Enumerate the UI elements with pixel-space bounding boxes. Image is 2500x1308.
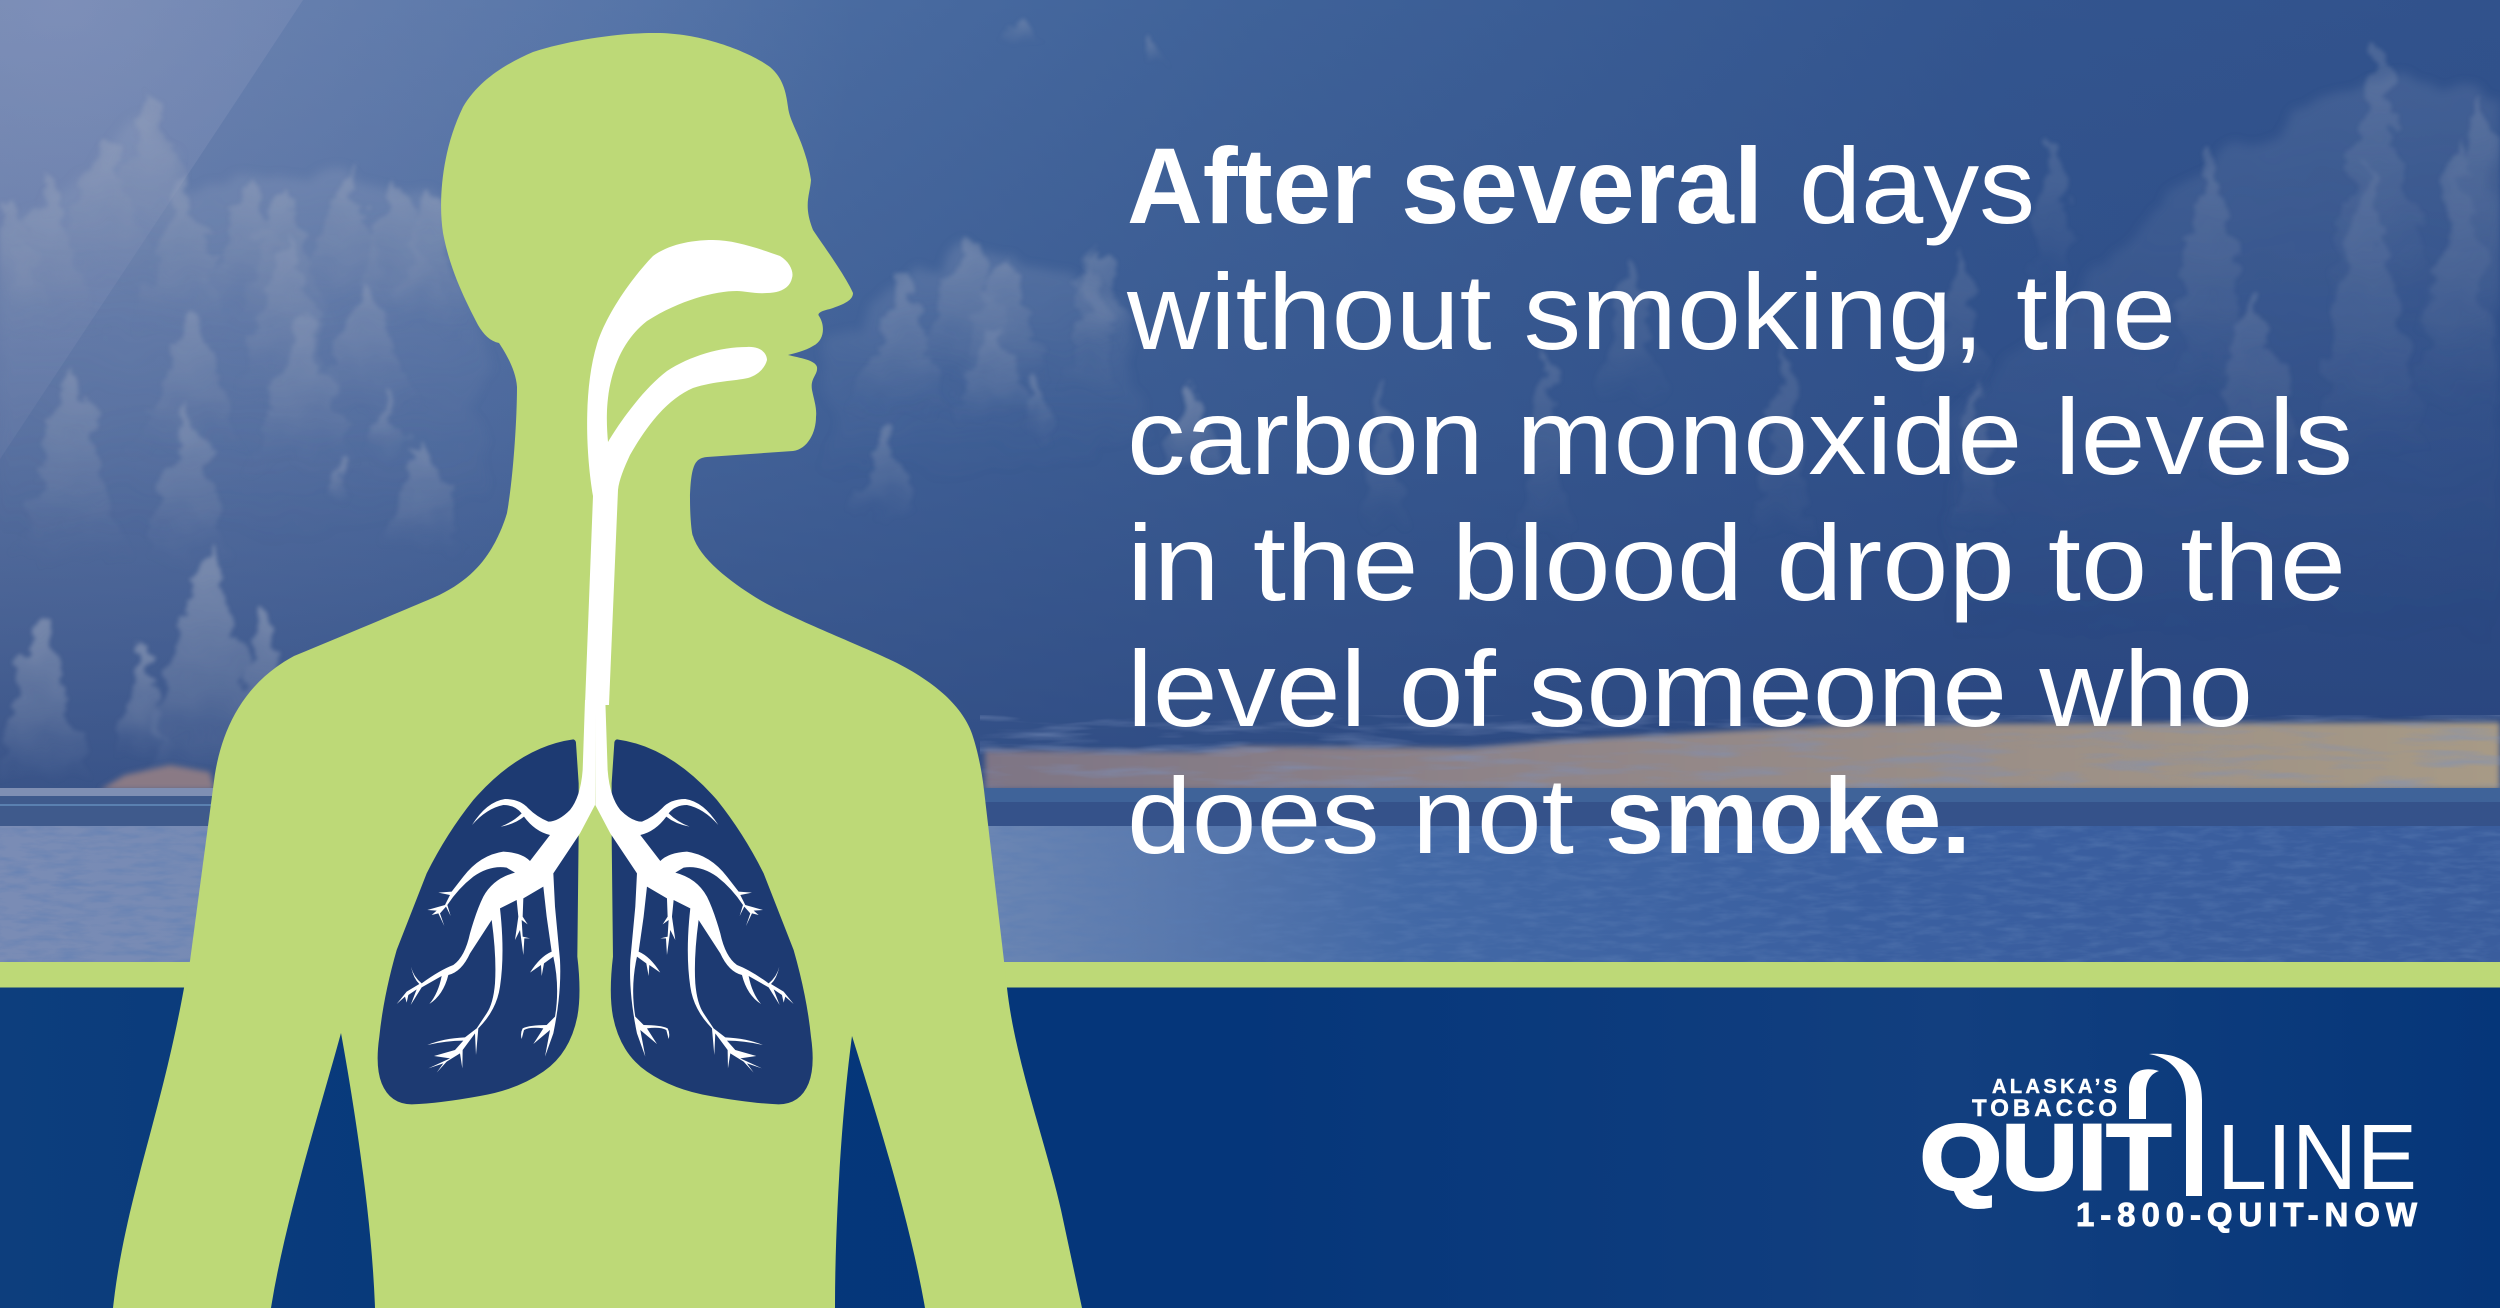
headline message: level of someone who [1127,628,2253,749]
green divider band [0,962,2500,988]
logo text: ALASKA’S [1992,1076,2117,1098]
headline message: in the blood drop to the [1127,502,2346,623]
sandy shore [100,718,2500,790]
water [0,788,2500,962]
airway: nasal passage, mouth and trachea [585,240,792,705]
logo text: LINE [2217,1105,2417,1209]
headline message: without smoking, the [1126,251,2176,372]
left bronchial tree [397,700,595,1073]
left lung [378,739,579,1104]
right lung [611,739,813,1104]
logo: Alaska's Tobacco Quitline [1920,1054,2418,1233]
forest: hazy hillside masses [0,70,2500,640]
forest: shoreline trees [0,552,298,792]
headline message: smoke. [1605,755,1971,876]
logo text: QUIT [1920,1105,2171,1209]
headline message: carbon monoxide levels [1127,376,2353,497]
forest: far right trees [1059,48,2500,544]
figure: human silhouette [113,33,1082,1308]
headline message: After several [1127,125,1763,246]
bronchi [397,700,794,1073]
headline message [1126,125,2353,876]
forest: trees right of head [847,10,1227,517]
headline message: days [1799,125,2035,246]
navy lower panel [0,987,2500,1308]
lungs [378,739,813,1104]
headline message: does not [1127,755,1574,876]
logo arch: small swoosh [2129,1069,2159,1119]
logo text: 1-800-QUIT-NOW [2076,1196,2418,1233]
right bronchial tree [595,700,794,1073]
forest: left trees [0,96,475,568]
background: mountain lake photo [0,0,2500,962]
logo text: TOBACCO [1972,1095,2117,1122]
logo text [1920,1076,2418,1233]
logo arch: large swoosh [2149,1054,2202,1196]
